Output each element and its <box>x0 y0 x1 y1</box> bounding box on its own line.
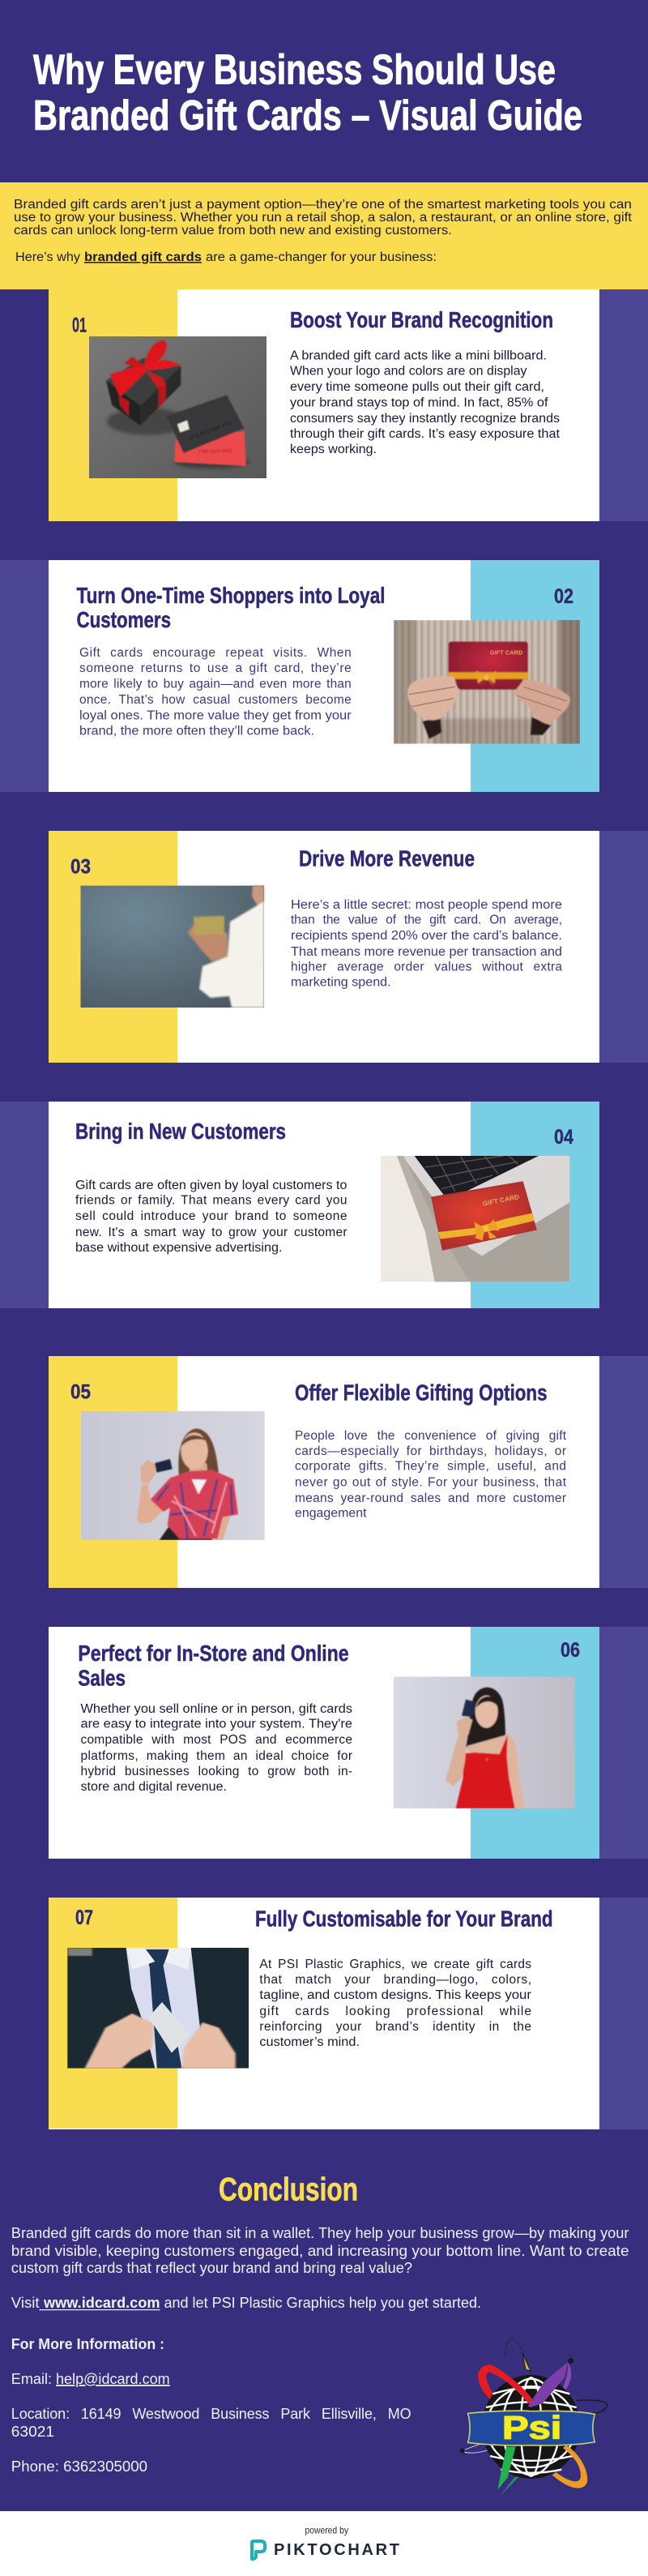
body text: Gift cards encourage repeat visits. When <box>79 646 352 660</box>
body text: platforms, making them an ideal choice for <box>81 1749 352 1763</box>
body text: your brand stays top of mind. In fact, 85% of <box>290 396 548 410</box>
icon: PSI logo: Psi <box>502 2411 561 2446</box>
text: powered by: powered by <box>305 2524 348 2535</box>
body text: through their gift cards. It’s easy exposure that <box>290 427 561 441</box>
body text: Here’s a little secret: most people spend more <box>291 898 562 912</box>
body text: loyal ones. The more value they get from your <box>79 708 352 722</box>
text block: contact information: help@idcard.com <box>56 2371 170 2387</box>
panel: 07 fully customisable for your brand <box>49 1898 648 2129</box>
number 05: 05 <box>70 1381 91 1404</box>
panel: 01 boost your brand recognition <box>49 289 648 521</box>
body text: That means more revenue per transaction and <box>291 945 562 959</box>
heading: Boost Your Brand Recognition <box>290 307 553 332</box>
body text: consumers say they instantly recognize brands <box>290 412 560 426</box>
heading: Bring in New Customers <box>75 1119 286 1144</box>
text block: contact information: Location: 16149 Westwood Business Park Ellisville, MO <box>11 2406 411 2422</box>
body text: once. That’s how casual customers become <box>79 693 352 707</box>
text block: contact information: Email: <box>11 2371 52 2387</box>
panel: introduction: cards can unlock long-term value from both new and existing customers. <box>14 224 452 237</box>
body text: never go out of style. For your business, that <box>295 1476 567 1490</box>
panel: introduction: are a game-changer for your business: <box>206 250 437 264</box>
panel: 02 turn one-time shoppers into loyal customers <box>0 560 599 792</box>
body text: are easy to integrate into your system. They're <box>81 1718 352 1731</box>
image: woman in plaid shirt with card <box>81 1411 265 1540</box>
image: gift box and cards: 5175 3131 8695 2950 <box>189 421 232 441</box>
text block: contact information: 63021 <box>11 2424 54 2440</box>
body text <box>291 898 562 990</box>
body text: more likely to buy again—and even more than <box>79 677 352 691</box>
body text <box>75 1179 347 1255</box>
number 01: 01 <box>72 315 87 337</box>
panel: 06 perfect for in-store and online sales <box>49 1627 648 1859</box>
image: man holding gold card <box>81 886 264 1008</box>
text block: conclusion paragraph <box>11 2225 629 2276</box>
body text: every time someone pulls out their gift card, <box>290 380 544 394</box>
image: gift card on laptop <box>381 1156 569 1282</box>
body text: compatible with most POS and ecommerce <box>81 1733 352 1747</box>
body text: At PSI Plastic Graphics, we create gift cards <box>259 1958 531 1971</box>
body text: tagline, and custom designs. This keeps your <box>259 1988 531 2002</box>
footer: powered by piktochart <box>0 2511 648 2576</box>
body text: marketing spend. <box>291 976 391 990</box>
body text: sell could introduce your brand to someone <box>75 1209 347 1223</box>
text: piktochart wordmark: PIKTOCHART <box>274 2541 399 2559</box>
body text: base without expensive advertising. <box>75 1241 282 1255</box>
body text: than the value of the gift card. On average, <box>291 914 562 927</box>
body text: brand, the more often they’ll come back. <box>79 724 314 738</box>
text block: visit website: Visit <box>11 2295 40 2311</box>
text block: contact information: For More Information : <box>11 2336 164 2352</box>
text block: contact information <box>11 2336 411 2475</box>
body text: corporate gifts. They’re simple, useful, and <box>295 1460 566 1474</box>
body text <box>259 1958 531 2049</box>
body text: reinforcing your brand’s identity in the <box>259 2020 531 2034</box>
icon: PSI logo <box>460 2339 608 2495</box>
heading: Drive More Revenue <box>299 846 475 871</box>
image: gift box and cards <box>89 336 266 478</box>
body text: someone returns to use a gift card, they’re <box>79 661 352 675</box>
panel: 05 offer flexible gifting options <box>49 1356 648 1588</box>
body text: A branded gift card acts like a mini billboard. <box>290 349 547 363</box>
body text: gift cards looking professional while <box>259 2005 531 2018</box>
text block: visit website: www.idcard.com <box>43 2295 160 2311</box>
body text: engagement <box>295 1507 367 1521</box>
body text: cards—especially for birthdays, holidays, or <box>295 1444 566 1458</box>
body text <box>81 1702 352 1794</box>
panel: introduction: Here’s why <box>15 250 80 264</box>
body text: recipients spend 20% over the card’s balance. <box>291 929 562 943</box>
panel: introduction <box>0 182 648 289</box>
body text <box>290 349 561 456</box>
number 02: 02 <box>554 585 573 608</box>
panel: 04 bring in new customers <box>0 1102 599 1308</box>
body text: new. It's a smart way to grow your customer <box>75 1226 347 1239</box>
body text <box>79 646 352 738</box>
text block: visit website <box>11 2295 481 2311</box>
text block: contact information: Phone: 6362305000 <box>11 2458 147 2475</box>
image: hands holding red gift card <box>394 620 580 744</box>
number 07: 07 <box>75 1906 93 1929</box>
text block: conclusion paragraph: custom gift cards that reflect your brand and bring real value? <box>11 2260 412 2276</box>
number 03: 03 <box>70 856 91 879</box>
heading: Fully Customisable for Your Brand <box>255 1906 553 1932</box>
body text: hybrid businesses looking to grow both in- <box>81 1765 352 1778</box>
heading: conclusion: Conclusion <box>219 2172 358 2208</box>
heading: Perfect for In-Store and Online <box>78 1641 349 1666</box>
body text: People love the convenience of giving gift <box>295 1429 567 1443</box>
image: gift card on laptop: GIFT CARD <box>482 1193 520 1208</box>
body text: that match your branding—logo, colors, <box>259 1973 531 1987</box>
image: gift box and cards: 7765 2525 5652 <box>198 449 232 455</box>
panel: introduction: Branded gift cards aren’t just a payment option—they’re one of the smartest marketing tools you can <box>14 198 632 212</box>
body text: store and digital revenue. <box>81 1780 227 1794</box>
image: hands holding red gift card: GIFT CARD <box>490 649 522 657</box>
heading: Turn One-Time Shoppers into Loyal <box>76 583 386 608</box>
panel: 03 drive more revenue <box>49 831 648 1063</box>
image: man in suit holding white card <box>67 1948 249 2069</box>
body text: When your logo and colors are on display <box>290 365 527 379</box>
text block: visit website: and let PSI Plastic Graphics help you get started. <box>164 2295 481 2311</box>
text block: conclusion paragraph: Branded gift cards do more than sit in a wallet. They help your business grow—by making your <box>11 2225 629 2241</box>
body text: means year-round sales and more customer <box>295 1491 566 1505</box>
body text: customer’s mind. <box>259 2035 360 2049</box>
heading: Customers <box>76 607 171 632</box>
body text: Whether you sell online or in person, gift cards <box>81 1702 352 1716</box>
title <box>33 47 582 139</box>
body text: higher average order values without extra <box>291 961 562 974</box>
body text: keeps working. <box>290 443 377 456</box>
heading <box>76 583 386 632</box>
heading: Sales <box>78 1665 126 1690</box>
image: woman in red top with card <box>394 1676 574 1808</box>
heading <box>78 1641 349 1690</box>
text block: conclusion paragraph: brand visible, keeping customers engaged, and increasing your bottom line. Want to create <box>11 2243 629 2259</box>
number 04: 04 <box>554 1126 573 1149</box>
body text <box>295 1429 567 1521</box>
body text: friends or family. That means every card you <box>75 1194 347 1208</box>
body text: Gift cards are often given by loyal customers to <box>75 1179 347 1192</box>
panel: introduction: branded gift cards <box>84 250 202 264</box>
number 06: 06 <box>561 1639 580 1662</box>
panel: introduction: use to grow your business. Whether you run a retail shop, a salon, a restaurant, or an online store, gift <box>14 211 633 225</box>
heading: Offer Flexible Gifting Options <box>295 1380 548 1406</box>
icon: piktochart mark <box>252 2541 265 2559</box>
